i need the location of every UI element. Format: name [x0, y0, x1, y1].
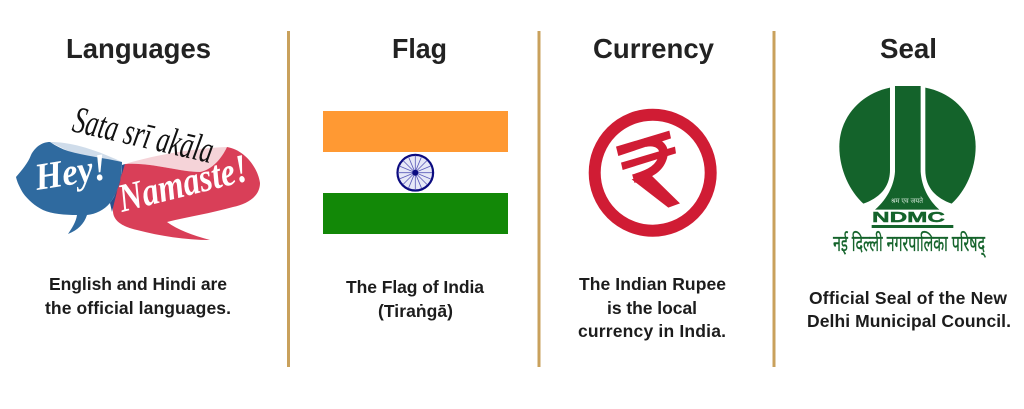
rupee glyph shape	[616, 131, 680, 208]
caption: currency: The Indian Rupee	[579, 274, 726, 294]
heading: Flag: Flag	[392, 33, 447, 64]
heading: Seal: Seal	[880, 33, 937, 64]
caption: seal	[807, 288, 1011, 331]
heading: Currency: Currency	[593, 33, 715, 64]
caption: flag: The Flag of India	[346, 277, 484, 297]
icon: speech bubbles	[16, 99, 260, 240]
caption: currency	[578, 274, 726, 341]
caption: seal: Official Seal of the New	[809, 288, 1007, 308]
overlap shade	[110, 164, 125, 212]
heading: Languages: Languages	[66, 33, 211, 64]
motto on trunk: श्रम एव जयते	[891, 196, 924, 205]
caption: languages: the official languages.	[45, 298, 231, 318]
red bubble	[113, 147, 260, 240]
icon: flag of India	[323, 111, 508, 234]
trunk	[875, 86, 939, 210]
caption: seal: Delhi Municipal Council.	[807, 311, 1011, 331]
right lobe	[925, 88, 976, 204]
caption: currency: currency in India.	[578, 321, 726, 341]
icon: NDMC seal	[833, 86, 986, 258]
pale highlight, red bubble	[125, 147, 227, 172]
caption: flag	[346, 277, 484, 321]
NDMC underline bar	[872, 225, 953, 228]
Ashoka Chakra	[398, 155, 433, 190]
script: Namaste!: Namaste!	[112, 145, 252, 221]
pale highlight, blue bubble	[50, 142, 122, 162]
NDMC lettering: NDMC	[872, 209, 945, 226]
blue bubble	[16, 142, 122, 234]
script: Sata sri akala: Sata srī akāla	[69, 99, 218, 172]
caption: flag: (Tiraṅgā)	[378, 301, 453, 321]
caption: currency: is the local	[607, 298, 697, 318]
icon: rupee symbol in circle	[595, 115, 711, 231]
left lobe	[839, 88, 890, 204]
script: Hey!: Hey!	[31, 146, 110, 199]
caption: languages	[45, 274, 231, 318]
caption: languages: English and Hindi are	[49, 274, 227, 294]
